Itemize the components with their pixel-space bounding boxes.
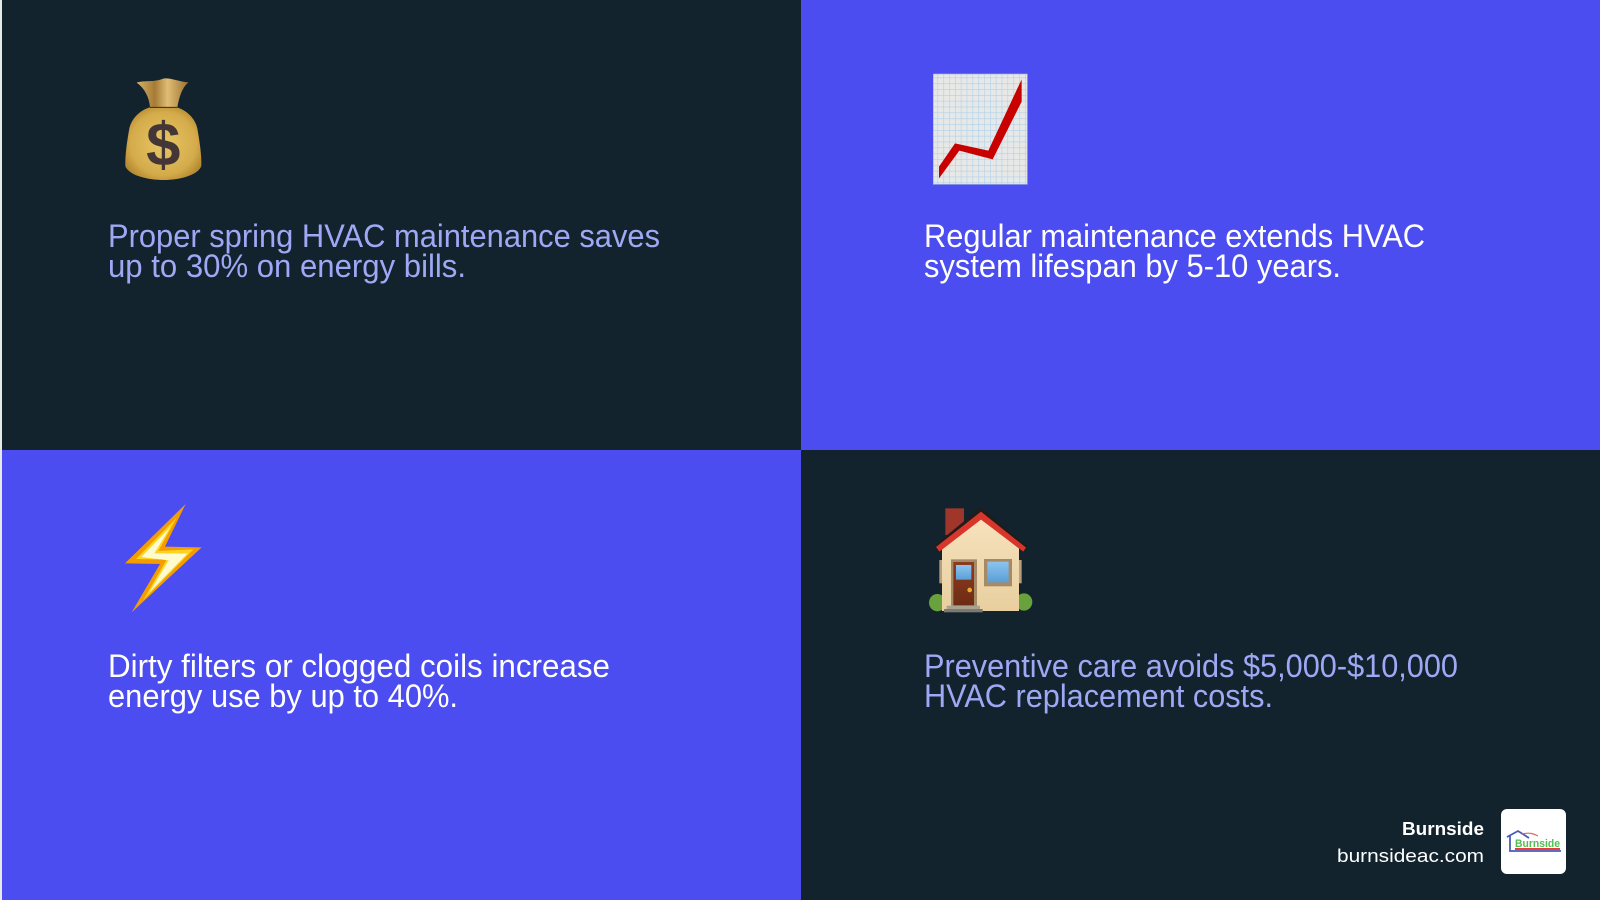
text: replacement fact [924,648,1458,714]
icon: house [929,507,1032,612]
text: replacement fact: Preventive care avoids $5,000-$10,000 [924,648,1458,684]
text: replacement fact: HVAC replacement costs. [924,678,1273,714]
panel: energy savings [2,0,801,450]
brand name: Burnside [1402,818,1484,839]
icon: lightning bolt [125,504,202,612]
icon: money bag [125,78,201,180]
logo: Burnside [1515,838,1560,850]
panel: energy use [2,450,801,900]
text: energy use fact [108,648,610,714]
text: lifespan fact: system lifespan by 5-10 years. [924,248,1341,284]
text: savings fact: Proper spring HVAC maintenance saves [108,218,660,254]
brand url: burnsideac.com [1337,845,1484,866]
text: savings fact [108,218,660,284]
logo [1501,809,1566,874]
text: lifespan fact [924,218,1425,284]
text: energy use fact: energy use by up to 40%. [108,678,458,714]
panel: replacement costs [801,450,1600,900]
icon: money bag: $ [146,110,180,179]
panel: system lifespan [801,0,1600,450]
icon: rising chart [933,74,1027,184]
text: lifespan fact: Regular maintenance extends HVAC [924,218,1425,254]
text: energy use fact: Dirty filters or clogged coils increase [108,648,610,684]
page background edge [0,0,2,900]
text: savings fact: up to 30% on energy bills. [108,248,466,284]
